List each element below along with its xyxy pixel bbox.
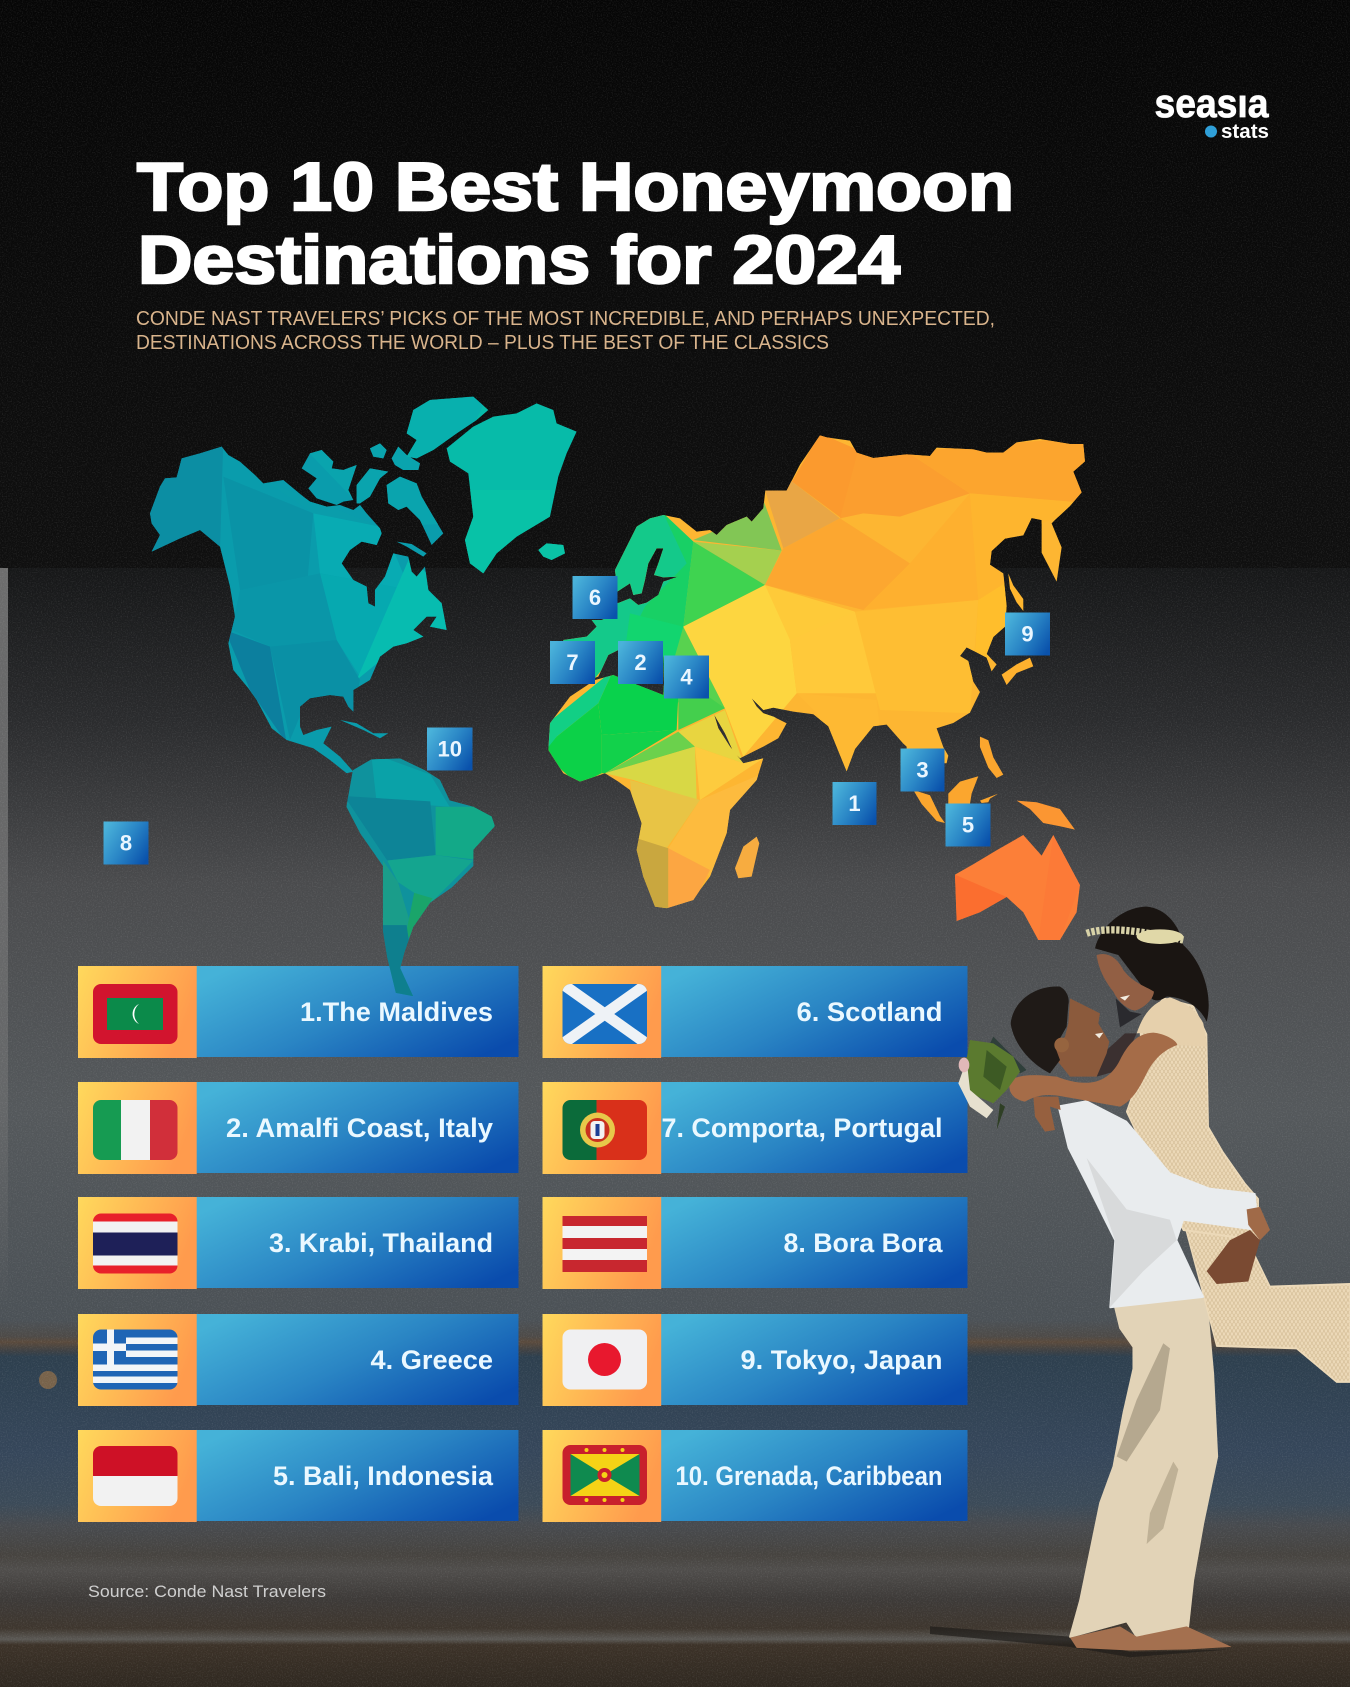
- card 2: Amalfi Coast, Italy: [78, 1082, 518, 1174]
- card 6: Scotland: 6. Scotland: [796, 997, 942, 1027]
- destination list cards: [78, 966, 968, 1522]
- map badge 3: 3: [916, 758, 929, 782]
- flag: Grenada: [562, 1445, 648, 1505]
- card 10: Grenada, Caribbean: 10. Grenada, Caribbean: [676, 1461, 942, 1491]
- map badge 6: [572, 576, 618, 619]
- map badge 2: [618, 641, 663, 684]
- card 8: Bora Bora: [542, 1197, 968, 1289]
- map badge 4: 4: [680, 664, 693, 690]
- map badge 7: 7: [566, 650, 579, 675]
- Africa: [543, 670, 763, 912]
- card 1: The Maldives: [78, 966, 518, 1058]
- card 9: Tokyo, Japan: 9. Tokyo, Japan: [740, 1345, 942, 1375]
- brand logo: seasia stats: [1154, 82, 1269, 143]
- source note: Source: Conde Nast Travelers: [88, 1583, 326, 1601]
- card 4: Greece: [78, 1314, 518, 1406]
- card 9: Tokyo, Japan: [542, 1314, 968, 1406]
- map badge 2: 2: [634, 650, 647, 675]
- flag: Thailand: [93, 1214, 178, 1274]
- card 5: Bali, Indonesia: [78, 1430, 518, 1522]
- card 10: Grenada, Caribbean: [542, 1430, 968, 1522]
- Asia: [683, 433, 1090, 773]
- flag: Scotland: [562, 984, 647, 1044]
- map badge 1: 1: [848, 791, 861, 816]
- map badge 5: 5: [962, 812, 974, 838]
- man's trousers: [1070, 1298, 1217, 1637]
- flag: Japan: [562, 1330, 648, 1390]
- bouquet: [958, 1037, 1027, 1130]
- card 7: Comporta, Portugal: 7. Comporta, Portugal: [662, 1113, 942, 1143]
- flag: Portugal: [562, 1100, 648, 1160]
- man's head: [1011, 987, 1109, 1077]
- woman's hair: [1095, 907, 1209, 1022]
- card 1: The Maldives: 1.The Maldives: [300, 997, 493, 1027]
- flower crown: [1087, 929, 1183, 944]
- man's hand behind her arm: [1033, 1097, 1061, 1132]
- bare feet: [1070, 1626, 1232, 1651]
- brand logo: seasia stats: seasıa: [1154, 82, 1269, 126]
- map: South America: [344, 753, 500, 1000]
- map: North America and Arctic islands: [150, 444, 447, 774]
- card 5: Bali, Indonesia: 5. Bali, Indonesia: [273, 1461, 494, 1491]
- woman's raised leg and skirt: [1183, 1220, 1350, 1382]
- subtitle: DESTINATIONS ACROSS THE WORLD – PLUS THE BEST OF THE CLASSICS: [136, 331, 829, 354]
- woman's hand on waist: [1207, 1230, 1260, 1284]
- map: Eurasia and Africa: [543, 433, 1090, 943]
- map: Madagascar: [735, 837, 759, 878]
- card 2: Amalfi Coast, Italy: 2. Amalfi Coast, Italy: [226, 1113, 493, 1143]
- subtitle: [136, 307, 995, 354]
- map badge 8: [104, 822, 148, 864]
- flag: Italy: [93, 1100, 178, 1160]
- flag: Bora Bora: [562, 1216, 647, 1272]
- woman's arm around the man: [1009, 1033, 1177, 1107]
- map badge 1: [832, 782, 876, 825]
- map badge 9: 9: [1021, 622, 1034, 646]
- map badge 10: [427, 728, 472, 770]
- map badge 8: 8: [120, 830, 132, 856]
- man's shirt: [1058, 1101, 1258, 1307]
- map badge 3: [900, 748, 944, 792]
- card 6: Scotland: [542, 966, 968, 1058]
- subtitle: CONDE NAST TRAVELERS’ PICKS OF THE MOST INCREDIBLE, AND PERHAPS UNEXPECTED,: [136, 307, 995, 330]
- map badge 6: 6: [589, 585, 601, 610]
- flag: Indonesia: [93, 1446, 178, 1506]
- world map: [140, 390, 1090, 1000]
- Europe and Scandinavia: [560, 500, 782, 713]
- woman's sleeve: [1137, 997, 1207, 1047]
- title: Top 10 Best Honeymoon: [137, 149, 1014, 225]
- flag: Greece: [93, 1330, 178, 1390]
- upper bodies and faces: [958, 907, 1209, 1132]
- brand logo: seasia stats: stats: [1221, 121, 1269, 143]
- card 3: Krabi, Thailand: [78, 1197, 518, 1289]
- map badge 5: [946, 804, 990, 846]
- map: Australia: [953, 833, 1083, 943]
- map: Greenland, Ellesmere and Iceland: [400, 390, 577, 577]
- map badge 4: [664, 656, 709, 698]
- card 7: Comporta, Portugal: [542, 1082, 968, 1174]
- card 3: Krabi, Thailand: 3. Krabi, Thailand: [269, 1228, 493, 1258]
- woman's dress bodice: [1127, 998, 1258, 1240]
- dark gap behind the couple: [1097, 1033, 1137, 1077]
- title: [137, 149, 1014, 298]
- map badge 9: [1005, 612, 1050, 656]
- card 4: Greece: 4. Greece: [370, 1345, 493, 1375]
- flag: Maldives: [93, 984, 178, 1044]
- woman's face: [1097, 954, 1154, 1011]
- photo: couple embracing on the beach: [930, 907, 1350, 1657]
- map badge 7: [550, 641, 595, 684]
- lower bodies: [930, 998, 1350, 1657]
- ground shadow: [930, 1626, 1230, 1657]
- card 8: Bora Bora: 8. Bora Bora: [784, 1228, 943, 1258]
- map: Sakhalin, Japan and south-east Asian islands: [913, 573, 1075, 830]
- title: Destinations for 2024: [138, 222, 900, 298]
- map badge 10: 10: [437, 736, 462, 762]
